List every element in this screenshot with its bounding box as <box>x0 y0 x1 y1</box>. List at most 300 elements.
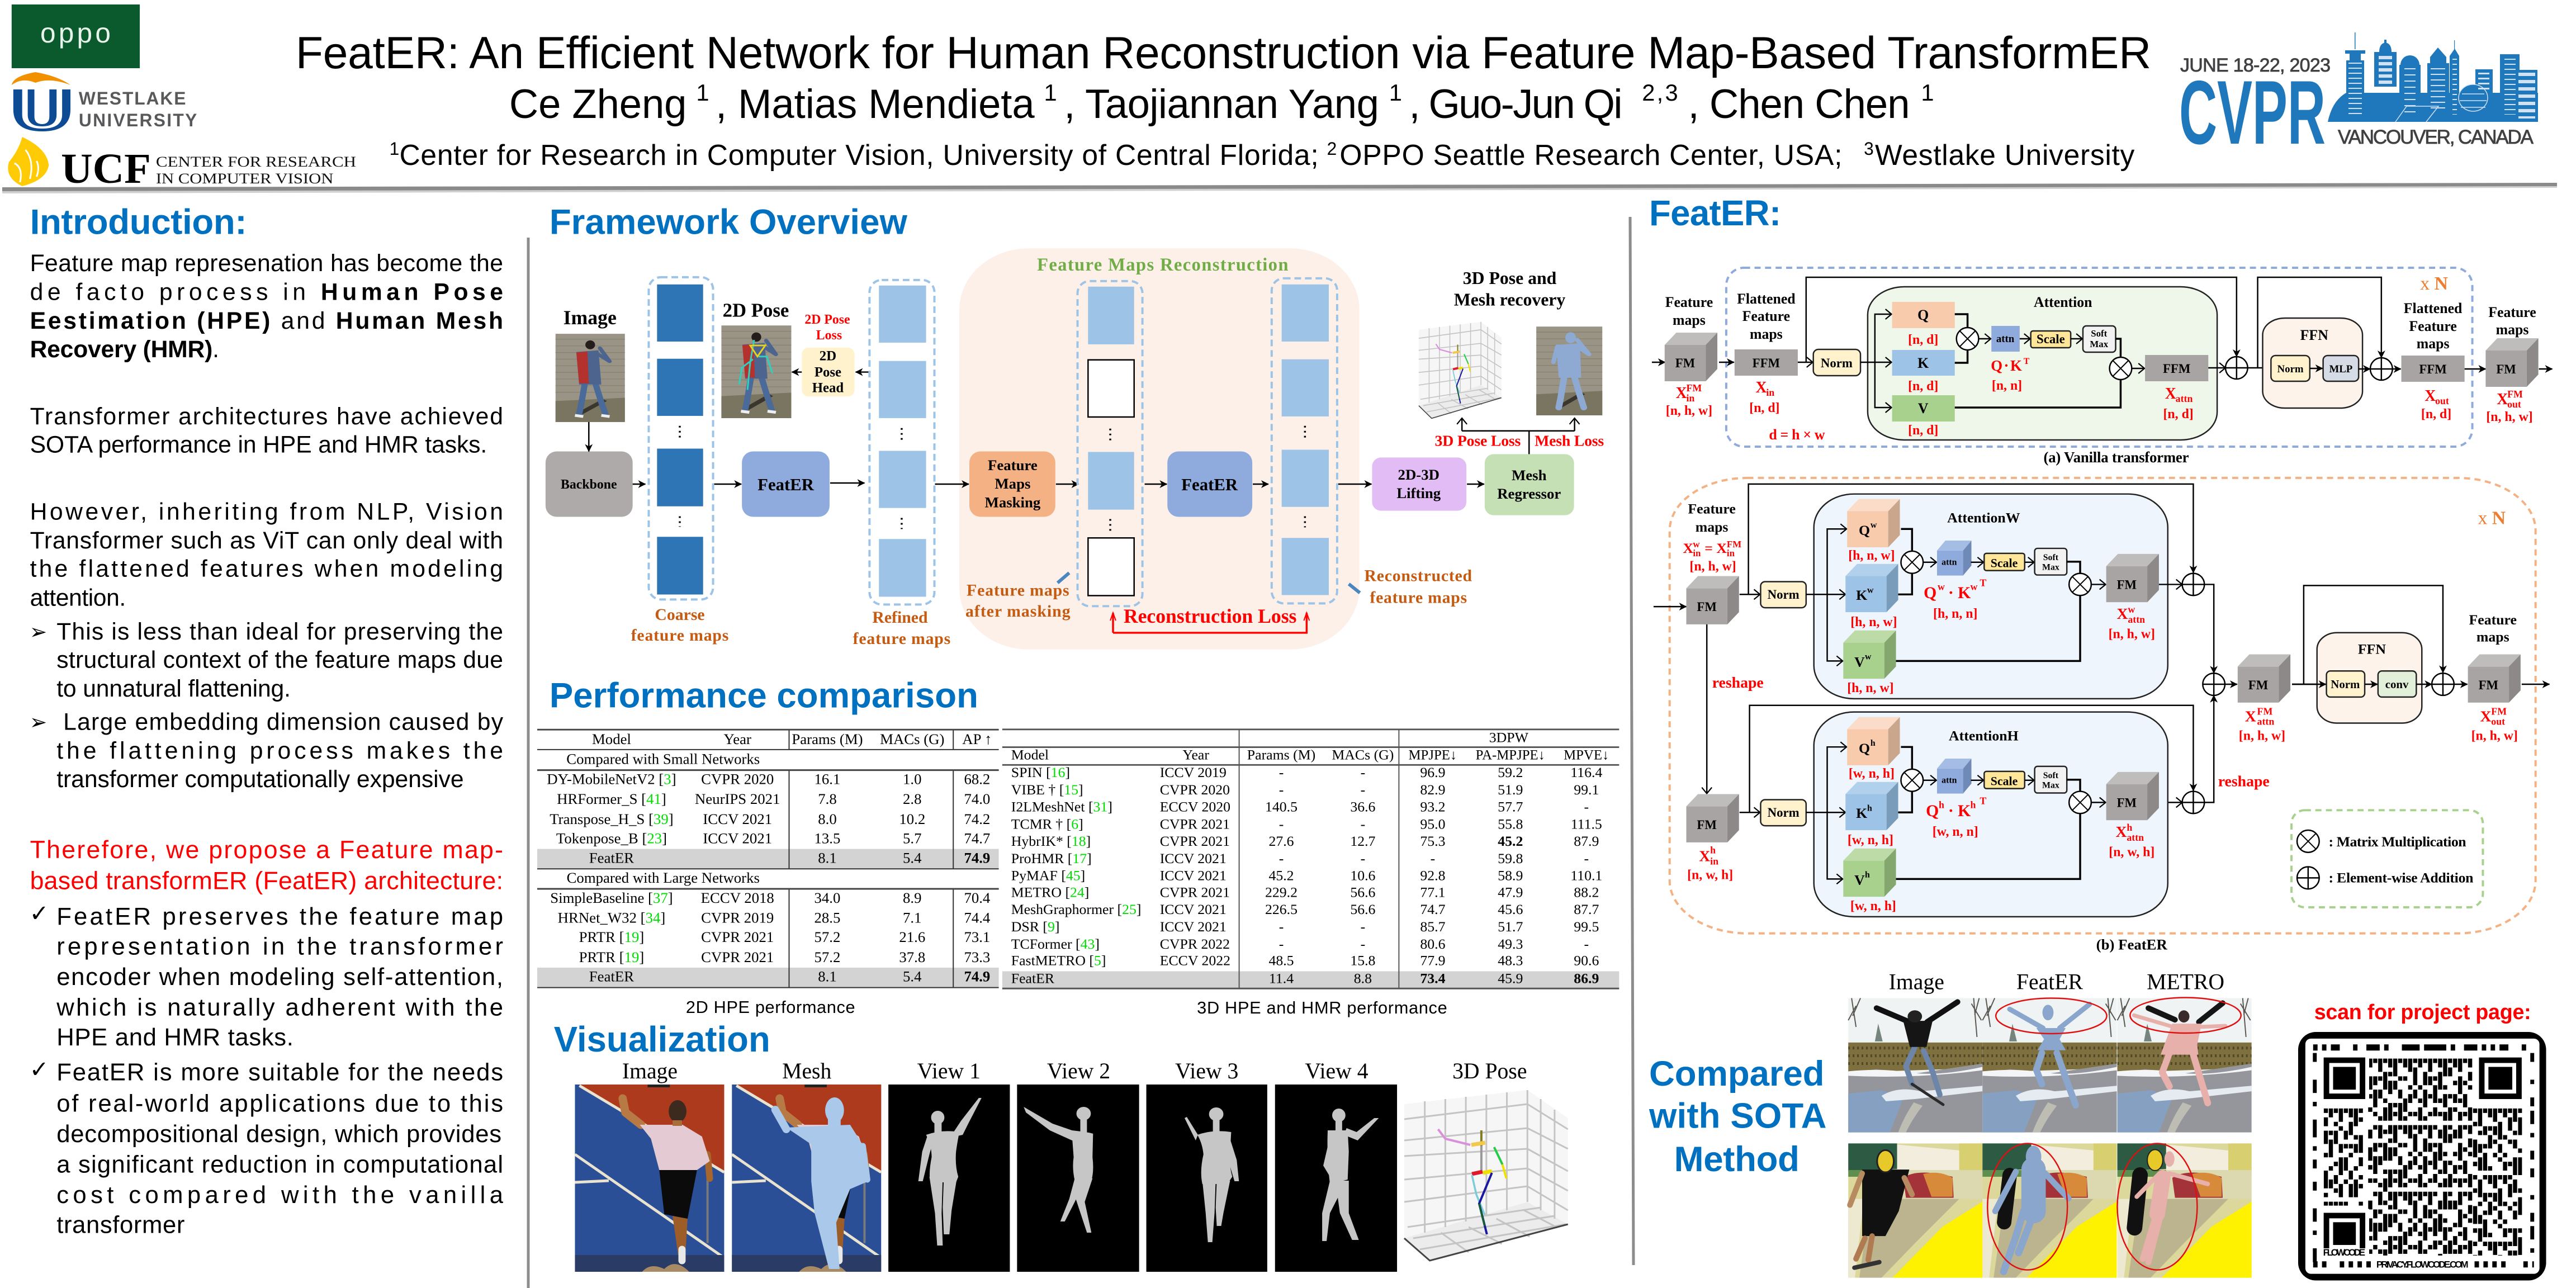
table: 3D HPE and HMR performance: 95.0 <box>1420 816 1445 832</box>
flattened feature maps output: X <box>2425 387 2436 405</box>
caption: reconstructed feature maps: Reconstructed <box>1365 567 1472 585</box>
2D pose loss: 2D Pose <box>804 312 850 327</box>
merged feature map: X <box>2245 708 2256 726</box>
affiliations: 3 <box>1864 139 1874 159</box>
table: 3D HPE and HMR performance: 8.8 <box>1354 970 1372 986</box>
output cube and labels: maps <box>2496 321 2528 338</box>
text block: proposal in red: based transformER (FeatER) architecture: <box>30 867 503 894</box>
table: 2D HPE performance: NeurIPS 2021 <box>695 790 780 807</box>
attention block: Attention <box>2034 294 2092 310</box>
attention H block <box>1806 712 2168 917</box>
attention W block: Q <box>1859 522 1870 538</box>
output cube and labels <box>2465 304 2552 424</box>
table: 3D HPE and HMR performance: - <box>1279 782 1284 798</box>
FFN block <box>2262 318 2370 408</box>
norm width branch <box>1740 581 1806 608</box>
table: 3D HPE and HMR performance: HybrIK* [18] <box>1011 833 1091 849</box>
attention H block: Max <box>2042 781 2059 790</box>
text block: background: to unnatural flattening. <box>56 675 291 702</box>
authors: 1 <box>696 79 709 106</box>
table: 3D HPE and HMR performance: - <box>1584 799 1589 815</box>
skip connection and FFN: FFN <box>2358 641 2386 657</box>
FFN block: MLP <box>2329 363 2353 375</box>
table: 3D HPE and HMR performance: CVPR 2022 <box>1160 936 1230 952</box>
3D pose and mesh recovery output: Mesh recovery <box>1454 290 1565 309</box>
table: 3D HPE and HMR performance: 11.4 <box>1269 970 1294 986</box>
bullets: arrows: ➢ <box>30 710 47 735</box>
mesh view 1 <box>888 1085 1010 1272</box>
affiliations <box>390 139 2134 171</box>
masked feature maps <box>1078 281 1143 606</box>
table: 3D HPE and HMR performance: - <box>1279 918 1284 935</box>
table: 3D HPE and HMR performance: SPIN [16] <box>1011 764 1070 780</box>
table: 3D HPE and HMR performance: - <box>1361 782 1365 798</box>
table: 3D HPE and HMR performance: CVPR 2021 <box>1160 884 1230 900</box>
input feature map height branch: Norm <box>1768 806 1800 820</box>
text block: background: Transformer such as ViT can only deal with <box>30 527 503 554</box>
table: 3D HPE and HMR performance: VIBE † [15] <box>1011 782 1083 798</box>
output feature map: maps <box>2476 629 2509 645</box>
table: 2D HPE performance: 74.9 <box>964 968 990 985</box>
attention block: Max <box>2090 339 2109 349</box>
output feature map: FM <box>2491 706 2507 717</box>
table: 3D HPE and HMR performance: MPVE↓ <box>1564 747 1609 763</box>
table: 2D HPE performance: 74.9 <box>964 849 990 866</box>
table: 3D HPE and HMR performance: 73.4 <box>1420 970 1446 986</box>
table: 2D HPE performance: 8.0 <box>818 811 837 827</box>
table: 2D HPE performance: Params (M) <box>792 731 863 747</box>
table: 3D HPE and HMR performance: 57.7 <box>1498 799 1523 815</box>
table: 3D HPE and HMR performance: - <box>1279 850 1284 866</box>
table: 2D HPE performance: 13.5 <box>815 830 840 847</box>
heading: Performance comparison: Performance comparison <box>550 676 978 715</box>
caption: reconstructed feature maps: feature maps <box>1370 588 1467 607</box>
table: 2D HPE performance: 73.1 <box>964 929 990 945</box>
text block: FeatER benefits: which is naturally adherent with the <box>56 994 503 1021</box>
table: 3D HPE and HMR performance: 86.9 <box>1574 970 1599 986</box>
heading: Introduction: Introduction: <box>30 202 247 242</box>
input feature map width branch: [n, h, w] <box>1689 560 1736 574</box>
column labels: View 2 <box>1047 1058 1110 1083</box>
attention H block: · K <box>1948 802 1971 820</box>
FFN block: Norm <box>2277 363 2304 375</box>
authors: 1 <box>1389 79 1402 106</box>
input feature map width branch: = X <box>1704 540 1727 556</box>
caption: 3D HPE and HMR performance: 3D HPE and HMR performance <box>1197 998 1447 1017</box>
table: 3D HPE and HMR performance: ECCV 2022 <box>1160 953 1230 969</box>
column labels <box>1889 970 2224 995</box>
table: 3D HPE and HMR performance: 87.7 <box>1574 901 1599 917</box>
heading: Compared with SOTA Method: Compared <box>1649 1054 1825 1093</box>
input cube and labels: in <box>1686 392 1694 404</box>
bullets: arrows <box>30 619 47 735</box>
authors: , Matias Mendieta <box>716 82 1035 127</box>
caption: feature maps after masking: Feature maps <box>967 581 1069 599</box>
skip connection 1 <box>1806 277 2237 362</box>
table: 3D HPE and HMR performance: 99.5 <box>1574 918 1599 935</box>
input feature map width branch <box>1654 500 1741 624</box>
attention block: FFM <box>2163 362 2190 376</box>
table: 2D HPE performance: 74.0 <box>964 790 990 807</box>
table: 2D HPE performance: ICCV 2021 <box>703 811 772 827</box>
flattened feature maps input: Feature <box>1742 308 1790 324</box>
table: 2D HPE performance: 57.2 <box>815 929 840 945</box>
attention H block: [w, n, h] <box>1848 833 1893 847</box>
table: 3D HPE and HMR performance: 51.7 <box>1498 918 1523 935</box>
table: 3D HPE and HMR performance: 85.7 <box>1420 918 1446 935</box>
table: 3D HPE and HMR performance: 80.6 <box>1420 936 1446 952</box>
input feature map height branch <box>1686 794 1806 882</box>
flattened feature maps input <box>1719 291 1798 415</box>
table: 3D HPE and HMR performance: 87.9 <box>1574 833 1599 849</box>
column labels: Mesh <box>782 1058 831 1083</box>
logo: CVPR 2023 Vancouver: JUNE 18-22, 2023 <box>2180 55 2331 76</box>
caption: vanilla transformer: (a) Vanilla transformer <box>2044 449 2189 466</box>
text block: proposal in red: Therefore, we propose a Feature map- <box>30 836 503 864</box>
title: FeatER: An Efficient Network for Human Reconstruction via Feature Map-Based TransformER <box>296 28 2151 78</box>
refined feature maps: Refined <box>872 608 928 627</box>
table: 3D HPE and HMR performance: 45.6 <box>1498 901 1523 917</box>
table: 3D HPE and HMR performance: 15.8 <box>1350 953 1375 969</box>
table: 2D HPE performance: 8.1 <box>818 849 837 866</box>
table: 2D HPE performance: 57.2 <box>815 949 840 965</box>
panel: comparison with SOTA <box>1649 970 2546 1281</box>
input cube and labels: [n, h, w] <box>1666 404 1712 418</box>
reconstruction loss: Reconstruction Loss <box>1124 605 1297 627</box>
FeatER block 2: FeatER <box>1181 475 1238 494</box>
text block: FeatER benefits: FeatER is more suitable for the needs <box>56 1059 503 1086</box>
backbone block <box>546 451 633 517</box>
attention W block: · K <box>1948 584 1971 602</box>
output feature map: FM <box>2479 678 2498 692</box>
panel: framework overview <box>546 202 1604 650</box>
input image <box>556 306 625 422</box>
attention W block: V <box>1854 654 1865 670</box>
attention H block: [w, n, n] <box>1933 825 1978 839</box>
legend: : Element-wise Addition <box>2329 869 2474 886</box>
table: 3D HPE and HMR performance: 45.2 <box>1268 868 1294 884</box>
attention W block: w <box>1938 581 1945 592</box>
table: 2D HPE performance: MACs (G) <box>880 731 944 747</box>
panel: FeatER heading and vanilla transformer <box>1649 193 2552 466</box>
attention W block: w <box>1865 652 1872 661</box>
attention W block: attn <box>1942 558 1957 567</box>
input feature map width branch: FM <box>1727 539 1741 550</box>
table: 2D HPE performance: HRNet_W32 [34] <box>558 910 665 926</box>
input cube and labels: FM <box>1675 356 1695 370</box>
table: 3D HPE and HMR performance: 77.9 <box>1420 953 1445 969</box>
add node <box>2370 358 2401 380</box>
input feature map height branch: FM <box>1697 818 1717 832</box>
table: 3D HPE and HMR performance: - <box>1361 936 1365 952</box>
output feature map: Feature <box>2469 612 2517 628</box>
attention W block: Max <box>2042 563 2059 572</box>
column labels: View 1 <box>917 1058 981 1083</box>
3D pose and mesh recovery output <box>1419 268 1602 418</box>
table: 3D HPE and HMR performance: 49.3 <box>1498 936 1523 952</box>
input image: Image <box>564 306 617 329</box>
table: 3D HPE and HMR performance: 111.5 <box>1571 816 1602 832</box>
norm width branch: Norm <box>1768 588 1800 602</box>
input cube and labels <box>1652 294 1717 418</box>
attention H block: h <box>1939 799 1944 810</box>
table: 3D HPE and HMR performance: 3DPW <box>1489 730 1529 746</box>
authors: , Guo-Jun Qi <box>1409 82 1622 127</box>
table: 3D HPE and HMR performance: 10.6 <box>1350 868 1376 884</box>
mesh regressor block: Mesh <box>1512 467 1547 484</box>
flattened feature maps output: Flattened <box>2404 300 2463 316</box>
heading: scan for project page: scan for project page: <box>2314 1000 2531 1024</box>
flattened feature maps input: FFM <box>1753 356 1780 370</box>
attention H block: [w, n, h] <box>1849 766 1895 781</box>
table: 3D HPE and HMR performance: I2LMeshNet [31] <box>1011 799 1112 815</box>
table: 3D HPE and HMR performance: FastMETRO [5] <box>1011 953 1106 969</box>
table: 2D HPE performance: PRTR [19] <box>579 929 644 945</box>
table: 2D HPE performance: CVPR 2019 <box>701 910 774 926</box>
2D pose loss <box>804 312 850 343</box>
mesh view 3 <box>1147 1085 1267 1272</box>
feature maps masking block: Masking <box>985 494 1041 511</box>
table: 3D HPE and HMR performance: 77.1 <box>1420 884 1445 900</box>
3D pose and mesh losses <box>1435 418 1604 454</box>
header divider <box>2 183 2557 193</box>
attention block: X <box>2165 385 2176 402</box>
skip connection and FFN <box>2292 585 2468 723</box>
attention H block: [w, n, h] <box>1850 899 1896 913</box>
attention block: Scale <box>2037 332 2065 346</box>
table: 3D HPE and HMR performance: CVPR 2020 <box>1160 782 1230 798</box>
caption: reconstructed feature maps <box>1349 567 1472 607</box>
attention block: [n, d] <box>1908 333 1938 347</box>
table: 2D HPE performance: 73.3 <box>964 949 990 965</box>
2D pose head <box>802 348 855 396</box>
attention block: [n, d] <box>1908 379 1938 394</box>
table: 2D HPE performance: 7.1 <box>903 910 922 926</box>
logo: Westlake University <box>12 72 197 131</box>
attention W block: K <box>1856 587 1867 603</box>
logo: CVPR 2023 Vancouver <box>2179 32 2538 163</box>
flattened feature maps output: FFM <box>2419 362 2447 376</box>
height branch connections <box>1707 574 2270 813</box>
bullets: check marks: ✓ <box>30 1055 49 1083</box>
affiliations: OPPO Seattle Research Center, USA; <box>1339 139 1842 171</box>
table: 2D HPE performance: 5.7 <box>903 830 922 847</box>
input cube and labels: X <box>1676 385 1687 402</box>
table: 2D HPE performance: DY-MobileNetV2 [3] <box>547 770 676 787</box>
attention W block: w <box>1871 520 1877 530</box>
feature maps masking block: Feature <box>988 457 1038 473</box>
attention H block: V <box>1854 872 1865 888</box>
caption: feature maps after masking: after masking <box>965 602 1071 621</box>
table: 3D HPE and HMR performance: 93.2 <box>1420 799 1445 815</box>
column labels: View 3 <box>1175 1058 1238 1083</box>
text block: background: Feature map represenation has become the <box>30 250 503 277</box>
column dividers <box>528 217 1633 1288</box>
table: 3D HPE and HMR performance: 110.1 <box>1570 868 1602 884</box>
affiliations: Center for Research in Computer Vision, University of Central Florida; <box>399 139 1319 171</box>
table: 3D HPE and HMR performance: 116.4 <box>1570 764 1602 780</box>
FeatER block 1: FeatER <box>757 475 815 494</box>
attention W block: attn <box>2128 614 2145 625</box>
text block: FeatER benefits: HPE and HMR tasks. <box>56 1024 293 1051</box>
text block: background: Large embedding dimension caused by <box>63 709 504 736</box>
logo: Westlake University: WESTLAKE <box>79 88 186 108</box>
mesh view 2 <box>1017 1085 1139 1272</box>
feature maps masking block <box>969 451 1055 517</box>
authors <box>509 79 1934 127</box>
affiliations: Westlake University <box>1875 139 2134 171</box>
flattened feature maps output: [n, d] <box>2421 407 2451 422</box>
coarse feature maps <box>631 277 728 645</box>
text block: background: the flattening process makes the <box>56 737 503 764</box>
table: 2D HPE performance: Compared with Large Networks <box>567 869 760 886</box>
table: 3D HPE and HMR performance: 74.7 <box>1420 901 1446 917</box>
flattened feature maps input: in <box>1766 387 1774 398</box>
merged feature map: FM <box>2248 678 2268 692</box>
output feature map: out <box>2491 716 2505 727</box>
input feature map width branch: FM <box>1697 600 1717 614</box>
table: 3D HPE and HMR performance: MPJPE↓ <box>1409 747 1457 763</box>
comparison row 2 <box>1848 1143 2252 1278</box>
panel: introduction <box>30 202 504 1239</box>
table: 2D HPE performance <box>537 730 999 988</box>
table: 2D HPE performance: ICCV 2021 <box>703 830 772 847</box>
table: 3D HPE and HMR performance: 229.2 <box>1265 884 1298 900</box>
input cube and labels: maps <box>1673 312 1706 328</box>
attention H block: FM <box>2117 795 2137 809</box>
text block: background: However, inheriting from NLP, Vision <box>30 499 503 525</box>
attention W block: [h, n, w] <box>1848 548 1895 563</box>
table: 2D HPE performance: 5.4 <box>903 849 922 866</box>
table: 2D HPE performance: 10.2 <box>899 811 925 827</box>
flattened feature maps input: [n, d] <box>1749 401 1779 415</box>
table: 3D HPE and HMR performance: 226.5 <box>1265 901 1298 917</box>
column labels: FeatER <box>2016 970 2083 995</box>
table: 2D HPE performance: 68.2 <box>964 770 990 787</box>
text block: proposal in red <box>30 836 503 894</box>
text block: FeatER benefits: of real-world applications due to this <box>56 1090 503 1117</box>
bullets: arrows: ➢ <box>30 619 47 644</box>
table: 3D HPE and HMR performance: 92.8 <box>1420 868 1445 884</box>
input cube and labels: Feature <box>1665 294 1713 310</box>
table: 3D HPE and HMR performance: 99.1 <box>1574 782 1599 798</box>
table: 3D HPE and HMR performance: - <box>1584 850 1589 866</box>
column labels: Image <box>622 1058 678 1083</box>
attention W block: Scale <box>1991 557 2018 570</box>
table: 3D HPE and HMR performance: 75.3 <box>1420 833 1445 849</box>
heading: Framework Overview: Framework Overview <box>550 202 907 242</box>
3D pose and mesh losses: 3D Pose Loss <box>1435 433 1521 450</box>
attention H block: h <box>1871 738 1876 748</box>
attention H block: [n, w, h] <box>2109 845 2154 860</box>
table: 3D HPE and HMR performance: TCFormer [43] <box>1011 936 1100 952</box>
attention H block: X <box>2116 823 2127 841</box>
2D-3D lifting block <box>1372 457 1466 511</box>
heading: Compared with SOTA Method: Method <box>1674 1140 1800 1179</box>
norm: Norm <box>1821 356 1853 370</box>
logo: UCF Center for Research in Computer Vision: CENTER FOR RESEARCH <box>156 154 356 170</box>
table: 3D HPE and HMR performance: 55.8 <box>1498 816 1523 832</box>
table: 3D HPE and HMR performance: - <box>1431 850 1435 866</box>
attention block: T <box>2024 357 2030 366</box>
attention block: Soft <box>2091 328 2108 339</box>
table: 3D HPE and HMR performance: MACs (G) <box>1332 746 1394 763</box>
flattened feature maps input: X <box>1756 379 1767 396</box>
coarse feature maps: Coarse <box>655 605 705 624</box>
logo: CVPR 2023 Vancouver: VANCOUVER, CANADA <box>2338 126 2534 148</box>
input cube and labels: FM <box>1686 382 1702 394</box>
attention W block <box>1806 494 2168 699</box>
input feature map width branch: in <box>1693 548 1701 558</box>
attention W block: T <box>1980 577 1986 588</box>
text block: background: This is less than ideal for preserving the <box>56 618 503 645</box>
reconstruction loss <box>1110 605 1309 633</box>
table: 3D HPE and HMR performance: 51.9 <box>1498 782 1523 798</box>
table: 2D HPE performance: HRFormer_S [41] <box>557 790 666 807</box>
repeat label: x N <box>2478 508 2506 528</box>
table: 3D HPE and HMR performance: 48.3 <box>1498 953 1523 969</box>
text block: background: de facto process in Human Pose <box>30 279 503 306</box>
table: 3D HPE and HMR performance: ICCV 2021 <box>1160 868 1227 884</box>
table: 3D HPE and HMR performance: ECCV 2020 <box>1160 799 1230 815</box>
attention H block: Scale <box>1991 775 2018 788</box>
logo: OPPO: oppo <box>40 17 111 49</box>
output cube and labels: FM <box>2496 362 2516 376</box>
FeatER block 2 <box>1167 451 1252 517</box>
add nodes and skip connection 2 <box>2208 277 2381 379</box>
table: 2D HPE performance: 34.0 <box>815 889 840 906</box>
logo: UCF Center for Research in Computer Vision: IN COMPUTER VISION <box>156 171 334 187</box>
table: 3D HPE and HMR performance: PyMAF [45] <box>1011 868 1085 884</box>
table: 3D HPE and HMR performance: 45.9 <box>1498 970 1523 986</box>
table: 3D HPE and HMR performance: - <box>1279 764 1284 780</box>
2D-3D lifting block: Lifting <box>1396 485 1441 501</box>
QR code <box>2298 1032 2546 1281</box>
input feature map width branch: maps <box>1696 519 1728 535</box>
table: 2D HPE performance: FeatER <box>589 968 634 985</box>
attention H block: Q <box>1926 802 1939 820</box>
flattened feature maps output <box>2402 300 2465 422</box>
logo: UCF Center for Research in Computer Vision <box>8 137 356 192</box>
table: 2D HPE performance: Transpose_H_S [39] <box>550 811 674 827</box>
attention W block: w <box>2128 604 2135 615</box>
attention H block: Soft <box>2043 771 2059 780</box>
table: 2D HPE performance: Model <box>592 731 631 747</box>
table: 2D HPE performance: 21.6 <box>899 929 925 945</box>
table: 2D HPE performance: 74.7 <box>964 830 990 847</box>
attention W block: [h, n, n] <box>1933 607 1977 621</box>
2D-3D lifting block: 2D-3D <box>1398 466 1439 483</box>
attention block: Q <box>1917 307 1929 323</box>
3D pose and mesh losses: Mesh Loss <box>1535 433 1604 450</box>
table: 2D HPE performance: 74.2 <box>964 811 990 827</box>
legend: : Matrix Multiplication <box>2329 834 2466 850</box>
table: 3D HPE and HMR performance: 45.2 <box>1498 833 1523 849</box>
panel: feature maps reconstruction background <box>959 248 1360 650</box>
attention H block: attn <box>2127 832 2144 843</box>
table: 3D HPE and HMR performance: - <box>1361 918 1365 935</box>
logos and title block <box>8 4 2151 192</box>
FeatER block 1 <box>742 451 830 517</box>
heading: Visualization: Visualization <box>554 1019 770 1059</box>
authors: 1 <box>1044 79 1057 106</box>
table: 2D HPE performance: 5.4 <box>903 968 922 985</box>
affiliations: 1 <box>390 139 399 159</box>
column labels: View 4 <box>1305 1058 1368 1083</box>
logo: Westlake University: UNIVERSITY <box>79 110 197 130</box>
comparison row 1 <box>1848 997 2252 1133</box>
table: 3D HPE and HMR performance: 27.6 <box>1268 833 1294 849</box>
